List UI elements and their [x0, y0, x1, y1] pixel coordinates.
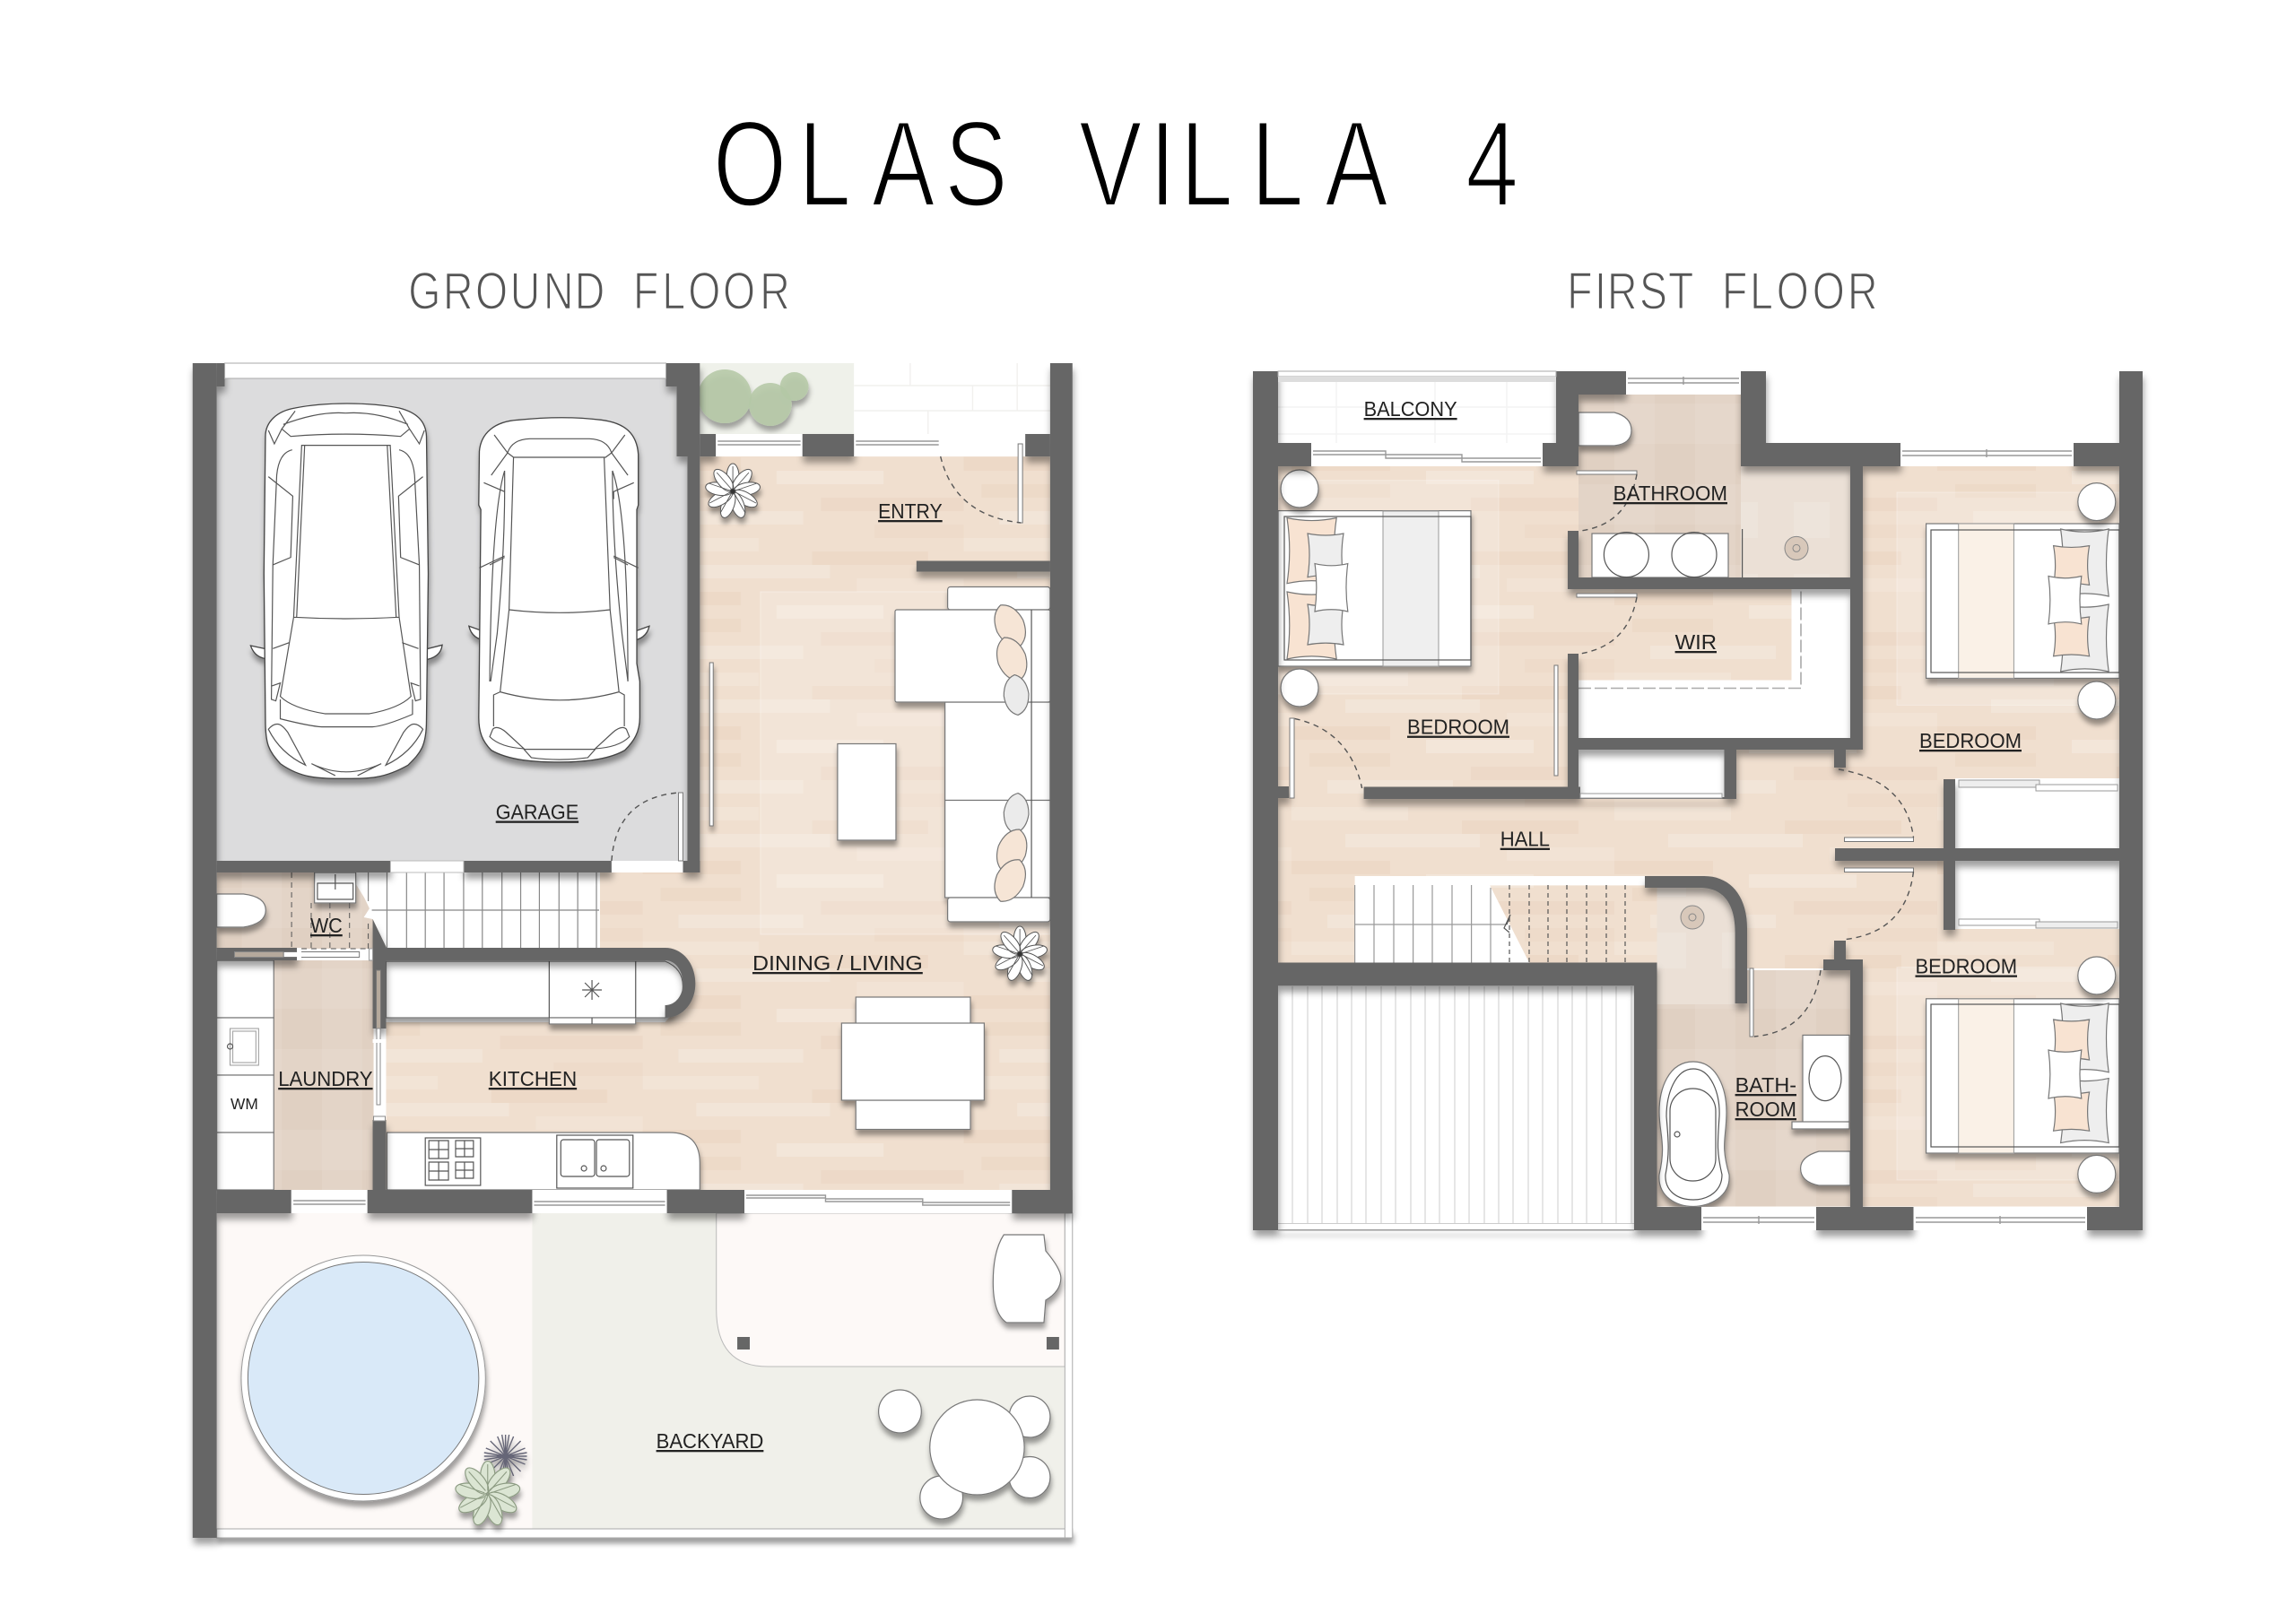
kitchen counter	[387, 1133, 700, 1190]
pool	[241, 1255, 485, 1501]
stairs: first floor	[1355, 876, 1645, 963]
icon: spiky plant	[484, 1435, 527, 1478]
nightstands: bedroom two	[2078, 483, 2116, 719]
heading: first floor: FIRST FLOOR	[1567, 263, 1878, 321]
laundry cabinets	[217, 960, 274, 1190]
labels: first floor rooms: BEDROOM	[1916, 954, 2017, 977]
labels: first floor rooms: HALL	[1500, 828, 1550, 851]
icon: green plant	[455, 1461, 521, 1527]
labels: first floor rooms	[1364, 397, 2022, 1121]
labels: ground floor rooms: LAUNDRY	[278, 1067, 373, 1090]
rug: bedroom three	[1897, 968, 2119, 1180]
furniture: sofa	[895, 586, 1050, 922]
floors: first floor surfaces	[1278, 371, 2119, 1207]
rug: bedroom two	[1897, 492, 2119, 705]
car: right	[469, 418, 649, 762]
lounge chair	[993, 1235, 1061, 1323]
stove and sink	[425, 1135, 633, 1188]
walls: ground floor	[193, 363, 1073, 1538]
labels: first floor rooms: BATHROOM	[1613, 482, 1727, 505]
panel: first floor plan	[1253, 371, 2143, 1230]
closets: bedroom	[1955, 778, 2119, 929]
bed: master	[1278, 511, 1471, 666]
labels: ground floor rooms: WC	[310, 914, 343, 937]
windows: first floor	[1278, 371, 2087, 1230]
labels: ground floor rooms	[278, 499, 943, 1453]
labels: first floor rooms: WIR	[1675, 630, 1717, 654]
rug: living	[761, 592, 1050, 934]
posts	[737, 1337, 1059, 1350]
labels: ground floor rooms: BACKYARD	[657, 1429, 763, 1453]
glass panel	[709, 663, 713, 826]
labels: first floor rooms: BATH-	[1735, 1073, 1796, 1097]
shrubs: front garden	[698, 369, 809, 426]
labels: first floor rooms: ROOM	[1735, 1098, 1796, 1121]
coffee table	[838, 744, 896, 840]
bathroom: upper fixtures	[1578, 412, 1808, 577]
icon: plant living	[992, 926, 1048, 983]
bed: bedroom two	[1926, 524, 2119, 678]
closet: hall	[1578, 750, 1725, 798]
void: stripes	[1278, 985, 1634, 1230]
labels: first floor rooms: BALCONY	[1364, 397, 1457, 421]
sofa cushions	[987, 599, 1033, 907]
labels: ground floor rooms: DINING / LIVING	[752, 951, 923, 975]
labels: ground floor rooms: ENTRY	[878, 499, 943, 523]
nightstands: bedroom three	[2078, 957, 2116, 1193]
cooktop on island	[549, 961, 636, 1024]
floors: ground floor surfaces	[217, 363, 1073, 1538]
stairs: ground	[349, 872, 599, 949]
rug: master bedroom	[1278, 481, 1499, 694]
cars: garage	[250, 404, 649, 778]
kitchen island	[386, 961, 683, 1024]
labels: ground floor rooms: KITCHEN	[489, 1067, 577, 1090]
title: OLAS VILLA 4	[713, 96, 1518, 231]
panel: ground floor plan	[193, 363, 1073, 1538]
labels: first floor rooms: BEDROOM	[1919, 729, 2022, 752]
windows: ground floor	[225, 363, 1025, 1213]
car: left	[250, 404, 442, 778]
labels: first floor rooms: BEDROOM	[1407, 716, 1509, 739]
laundry cabinets: WM	[230, 1095, 258, 1113]
heading: ground floor: GROUND FLOOR	[408, 263, 790, 321]
dining set	[841, 997, 984, 1130]
walls: first floor	[1253, 371, 2143, 1230]
icon: plant entry	[705, 464, 761, 520]
bed: bedroom three	[1926, 999, 2119, 1153]
wardrobe marker: WIR	[1578, 589, 1801, 689]
doors: first floor	[1290, 471, 2118, 1037]
outdoor table	[879, 1390, 1050, 1519]
labels: ground floor rooms: GARAGE	[496, 800, 578, 824]
bathroom: lower fixtures	[1659, 906, 1850, 1207]
nightstands: master	[1281, 470, 1318, 707]
wc fixtures	[217, 872, 387, 949]
doors: ground floor	[235, 444, 1022, 1121]
bottom edge shadow: first floor	[1278, 1229, 1634, 1230]
